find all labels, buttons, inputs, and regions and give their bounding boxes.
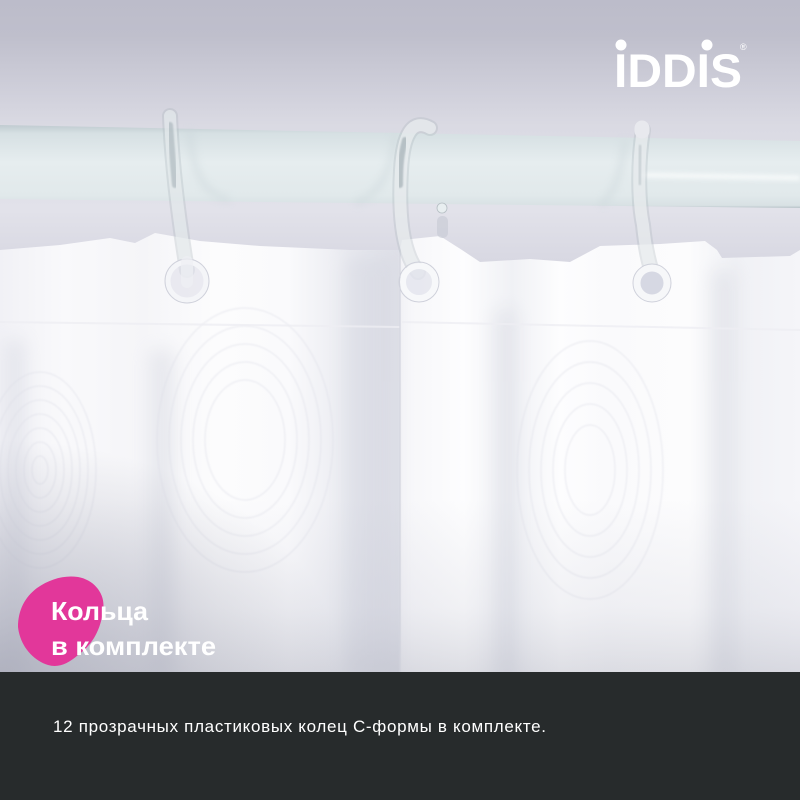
logo: iDDiS: ® bbox=[740, 42, 747, 52]
pink blob badge bbox=[18, 576, 103, 666]
footer description: 12 прозрачных пластиковых колец С-формы в комплекте. bbox=[53, 717, 546, 736]
wall background bbox=[0, 0, 800, 300]
logo: iDDiS: IDDIS bbox=[614, 44, 742, 97]
ring 3 bbox=[633, 128, 671, 302]
curtain swirl pattern bbox=[56, 308, 664, 578]
curtain rod bbox=[0, 125, 800, 208]
curtain hem line bbox=[58, 322, 700, 328]
badge heading: в комплекте bbox=[51, 631, 216, 661]
ring 1 bbox=[165, 116, 209, 303]
badge heading: Кольца bbox=[51, 596, 149, 626]
dark footer panel bbox=[0, 672, 800, 800]
badge heading bbox=[51, 596, 216, 661]
curtain folds bbox=[5, 255, 734, 680]
ring 2 bbox=[399, 125, 448, 302]
shower curtain bbox=[0, 233, 800, 680]
